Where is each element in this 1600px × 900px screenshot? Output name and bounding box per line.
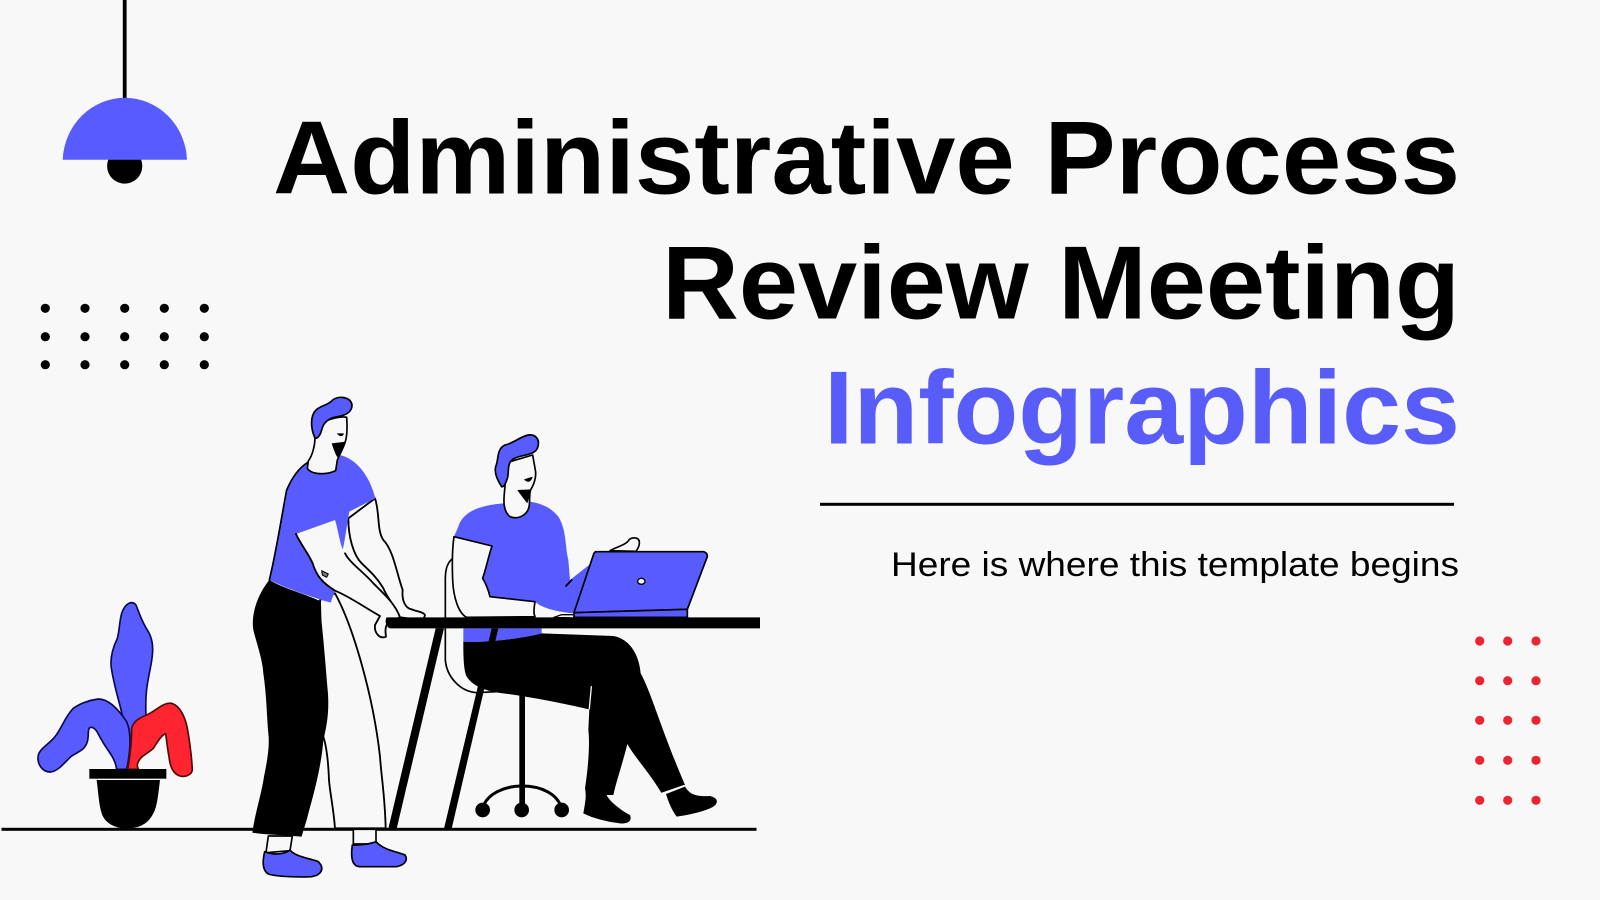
- beard: [517, 489, 532, 503]
- ground line: [2, 828, 756, 831]
- black dot grid: [41, 304, 209, 369]
- front arm: [452, 537, 535, 617]
- chair wheels: [475, 803, 569, 817]
- left blue leaf: [38, 699, 130, 772]
- leg highlight: [589, 687, 591, 709]
- tall blue leaf: [111, 603, 153, 740]
- pants: [463, 633, 685, 823]
- shirt: [454, 502, 593, 613]
- desk top: [386, 617, 760, 628]
- subtitle: Here is where this template begins: [891, 546, 1459, 584]
- pants: [252, 580, 328, 837]
- hair: [495, 435, 538, 487]
- title line 2: Review Meeting: [662, 225, 1460, 341]
- wrist: [554, 615, 574, 618]
- shirt: [269, 455, 375, 603]
- pot rim: [89, 769, 166, 779]
- icon: potted plant: [38, 603, 192, 828]
- front ankle: [266, 836, 292, 853]
- title line 1: Administrative Process: [273, 100, 1460, 216]
- neck and face: [504, 455, 536, 518]
- laptop base: [574, 609, 687, 617]
- desk leg back: [444, 628, 498, 829]
- mouth: [337, 433, 344, 436]
- icon: hanging lamp: [63, 0, 187, 184]
- shirt hem: [463, 628, 542, 642]
- laptop logo: [638, 578, 645, 584]
- title divider: [820, 503, 1454, 506]
- red dot grid: [1475, 636, 1541, 805]
- red leaf: [128, 703, 192, 776]
- shirt side outline: [269, 463, 307, 580]
- chair post: [519, 692, 525, 810]
- neck and face: [307, 417, 347, 474]
- trouser cuff: [662, 786, 684, 793]
- desk: [386, 617, 760, 829]
- title: [273, 100, 1460, 466]
- desk leg front: [388, 628, 444, 829]
- title line 3: Infographics: [824, 350, 1460, 466]
- back shoe: [352, 842, 406, 867]
- hand behind laptop: [610, 538, 639, 551]
- standing person: [252, 397, 425, 877]
- chair back: [445, 558, 497, 693]
- laptop screen: [574, 552, 707, 613]
- sleeve line: [566, 580, 572, 586]
- front arm outline: [296, 534, 400, 637]
- chair base: [483, 786, 562, 809]
- back shoe: [666, 787, 717, 817]
- front arm: [296, 520, 400, 637]
- back leg: [320, 593, 386, 828]
- tattoo: [322, 571, 328, 577]
- mouth: [524, 477, 533, 482]
- pot body: [97, 780, 160, 828]
- back ankle: [353, 829, 376, 844]
- hair: [312, 397, 352, 438]
- beard: [332, 442, 346, 457]
- front shoe: [263, 850, 322, 877]
- seated person at desk: [445, 435, 717, 823]
- back arm: [348, 498, 425, 620]
